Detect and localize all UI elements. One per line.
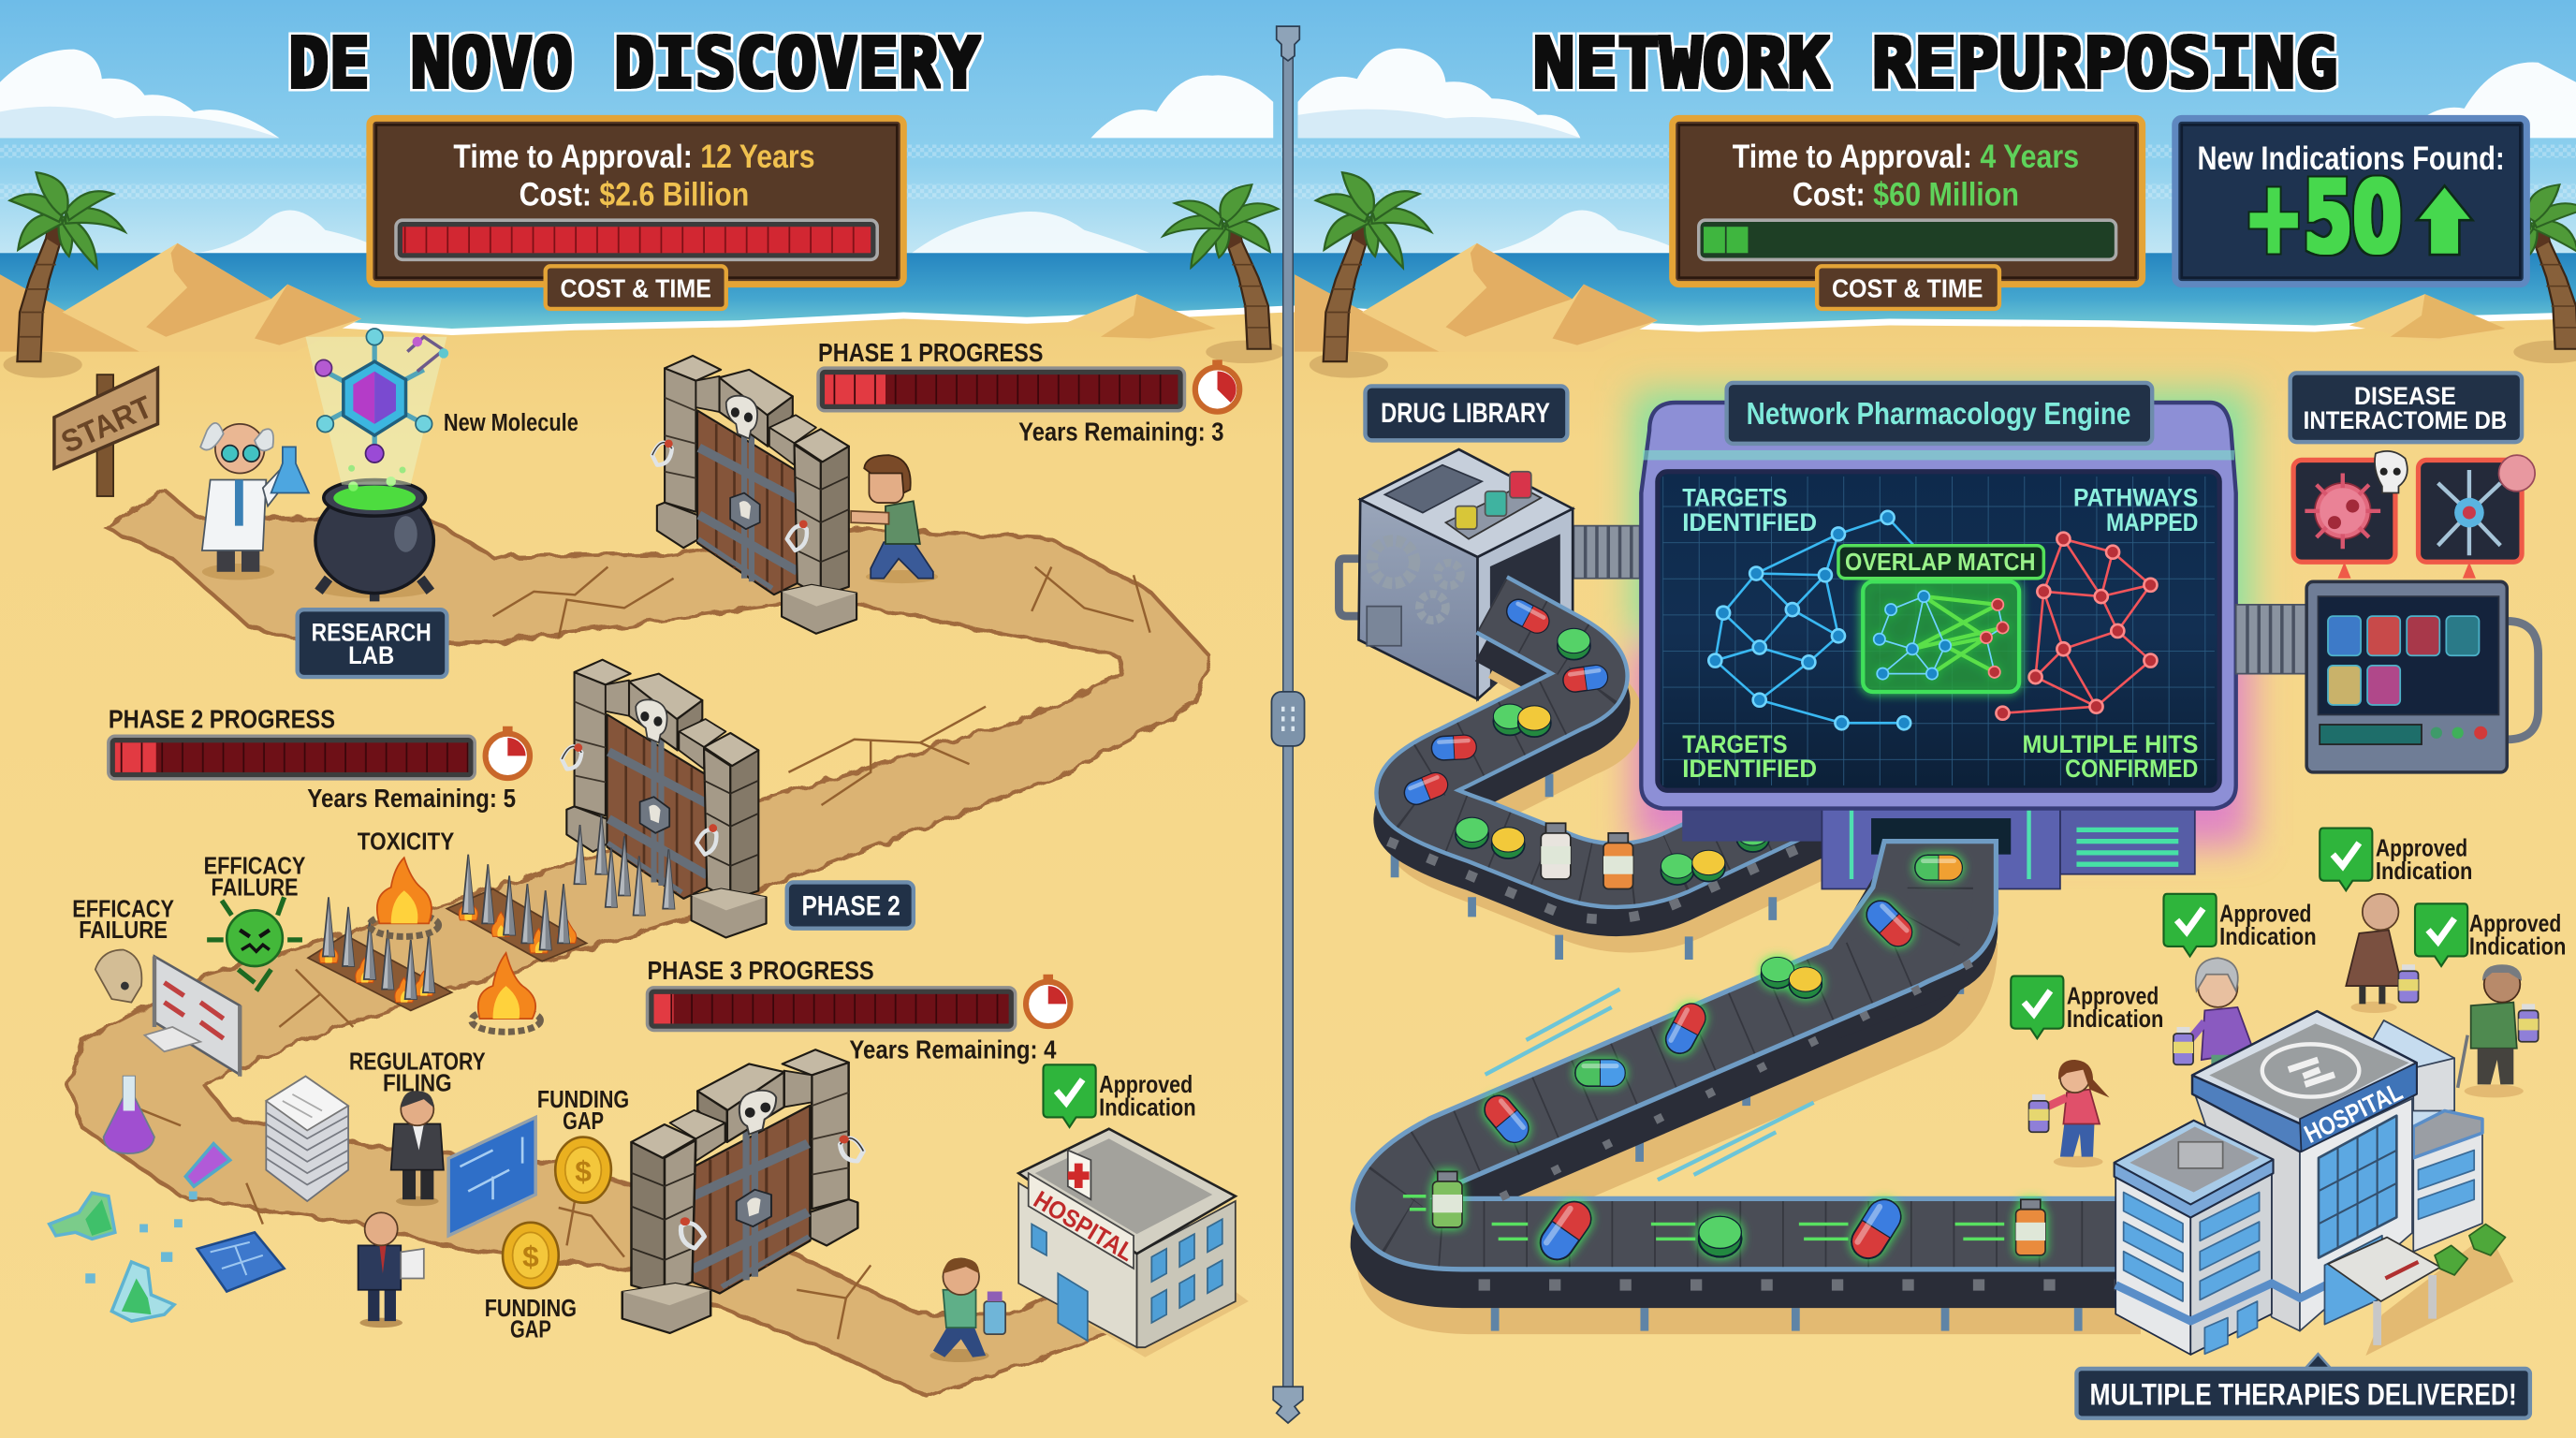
phase 2 progress: Years Remaining: 5 [307,784,516,813]
businessman figure [359,1212,424,1328]
person pushing gate [851,455,938,583]
cost and time panel: Cost: $60 Million [1793,176,2019,213]
phase 1 progress [818,338,1239,446]
tag: drug library [1365,386,1567,440]
gate 1 [652,356,856,634]
cauldron [315,465,433,601]
screen labels: CONFIRMED [2065,754,2198,783]
divider [1271,26,1305,1423]
phase 1 progress: PHASE 1 PROGRESS [818,338,1043,367]
tag: research lab: LAB [348,640,394,669]
gate 2 [562,660,767,937]
approved indication badge [1043,1064,1196,1127]
approved indication badge: Indication [1099,1095,1196,1122]
labels: hazards [72,829,454,944]
cost and time panel [370,118,903,309]
title: de novo discovery: DE NOVO DISCOVERY [288,24,981,104]
screen labels [1682,483,2198,783]
approved indication badges: Approved [2067,983,2159,1009]
coins and funding gap labels: FUNDING [485,1296,577,1322]
tag: disease interactome db: INTERACTOME DB [2304,405,2507,434]
screen labels: IDENTIFIED [1682,754,1817,783]
icon: stopwatch [486,726,530,778]
hospital small: HOSPITAL [1029,1185,1139,1267]
tag: research lab: RESEARCH [312,617,432,646]
tag: engine title: Network Pharmacology Engine [1747,397,2130,432]
patient: grandmother [2174,958,2254,1078]
approved indication badges: Indication [2219,924,2317,950]
phase 2 progress: PHASE 2 PROGRESS [109,705,335,734]
cost progress bar [396,220,877,259]
tag: cost and time [546,266,726,309]
conveyor 1 [1388,605,1828,960]
hospital large: HOSPITAL [2300,1077,2407,1149]
title: network repurposing: NETWORK REPURPOSING [1533,24,2338,104]
drug library machine [1339,449,1640,699]
spike traps and flames [308,815,674,1032]
approved indication badges: Approved [2219,902,2311,928]
screen labels: PATHWAYS [2073,483,2198,512]
phase 3 progress: PHASE 3 PROGRESS [648,956,874,985]
new indications panel [2175,118,2526,285]
blue network [1708,511,1914,729]
tag: phase 2: PHASE 2 [801,891,900,922]
labels: hazards: TOXICITY [358,829,454,855]
engine glow [1633,391,2250,846]
tag: research lab [298,609,446,677]
conveyor 2 [1388,842,2141,1331]
tag: disease interactome db [2291,373,2522,442]
scientist [200,423,309,580]
icon: virus [207,897,302,990]
start sign [54,368,157,496]
cost and time panel: Cost: $2.6 Billion [520,176,749,213]
tag: engine title [1727,383,2152,444]
phase 1 progress: Years Remaining: 3 [1018,417,1224,446]
label: new molecule: New Molecule [444,408,578,436]
engine lower unit [1682,801,2195,889]
molecule with light beam [305,329,448,485]
patient with bottle [929,1258,1005,1362]
disease cards [2293,451,2535,579]
flasks and lab debris [50,1077,285,1321]
tag: cost and time [1817,266,1999,309]
new indications panel: New Indications Found: [2197,140,2505,177]
tag: cost and time: COST & TIME [560,274,711,303]
new indications panel: +50 [2244,160,2402,275]
patient: old man brown [2346,894,2419,1013]
panel: de novo discovery [50,24,1249,1397]
coins and funding gap labels: FUNDING [537,1087,629,1113]
coins and funding gap labels: GAP [563,1108,604,1135]
tag: drug library: DRUG LIBRARY [1381,398,1550,429]
phase 3 progress [648,956,1070,1064]
start sign: START [56,390,157,461]
network pharmacology engine [1641,383,2236,889]
palm trees [4,172,2576,378]
icon: stopwatch [1195,360,1239,412]
cost and time panel: Time to Approval: 12 Years [453,139,815,175]
red network [1996,533,2157,720]
cost and time panel: Time to Approval: 4 Years [1733,139,2079,175]
icon: up arrow [2417,185,2472,255]
label: regulatory filing [349,1049,486,1096]
patient: old man green [2458,964,2539,1097]
screen labels: TARGETS [1682,729,1788,758]
cost progress bar [1699,220,2116,259]
gate 3 [622,1049,863,1333]
hospital large [2115,1011,2513,1356]
screen labels: MAPPED [2106,507,2198,536]
dunes [0,243,2506,352]
regulator figure [391,1091,444,1206]
approved indication badges: Approved [2376,835,2467,861]
screen labels: TARGETS [1682,483,1788,512]
tag: cost and time: COST & TIME [1832,274,1983,303]
label: regulatory filing: FILING [383,1070,452,1096]
label: regulatory filing: REGULATORY [349,1049,486,1076]
labels: hazards: EFFICACY [72,896,174,922]
overlap box [1863,581,2019,692]
phase 2 progress [109,705,530,813]
labels: hazards: FAILURE [79,917,168,944]
coins and funding gap labels: $ [522,1240,539,1273]
panel: network repurposing [1339,24,2566,1418]
tag: overlap match: OVERLAP MATCH [1845,548,2036,576]
desert path with cracks [69,490,1211,1397]
phase 3 progress: Years Remaining: 4 [849,1034,1057,1064]
coins and funding gap labels: GAP [510,1317,551,1343]
screen labels: MULTIPLE HITS [2023,729,2198,758]
cost and time panel [1673,118,2143,309]
engine screen [1658,472,2219,790]
icon: stopwatch [1026,975,1070,1026]
approved indication badges: Indication [2067,1006,2163,1033]
approved indication badges [2011,829,2566,1038]
tag: phase 2 [787,882,914,929]
coins and funding gap labels: $ [575,1154,592,1188]
screen labels: IDENTIFIED [1682,507,1817,536]
coins and funding gap labels [485,1087,629,1343]
blueprint board [448,1117,535,1236]
labels: hazards: EFFICACY [204,854,305,880]
approved indication badges: Indication [2376,858,2472,885]
pills on conveyor 2 [1432,855,2045,1266]
hospital small [1018,1129,1249,1357]
approved indication badge: Approved [1099,1072,1193,1098]
labels: hazards: FAILURE [212,875,299,902]
broken sign and skull [95,949,240,1077]
banner: multiple therapies delivered [2076,1354,2530,1418]
interactome machine [2236,581,2539,772]
patient: child [2029,1060,2110,1167]
paper stack [266,1077,348,1201]
tag: disease interactome db: DISEASE [2354,381,2456,410]
pills on conveyor 1 [1401,595,1769,889]
